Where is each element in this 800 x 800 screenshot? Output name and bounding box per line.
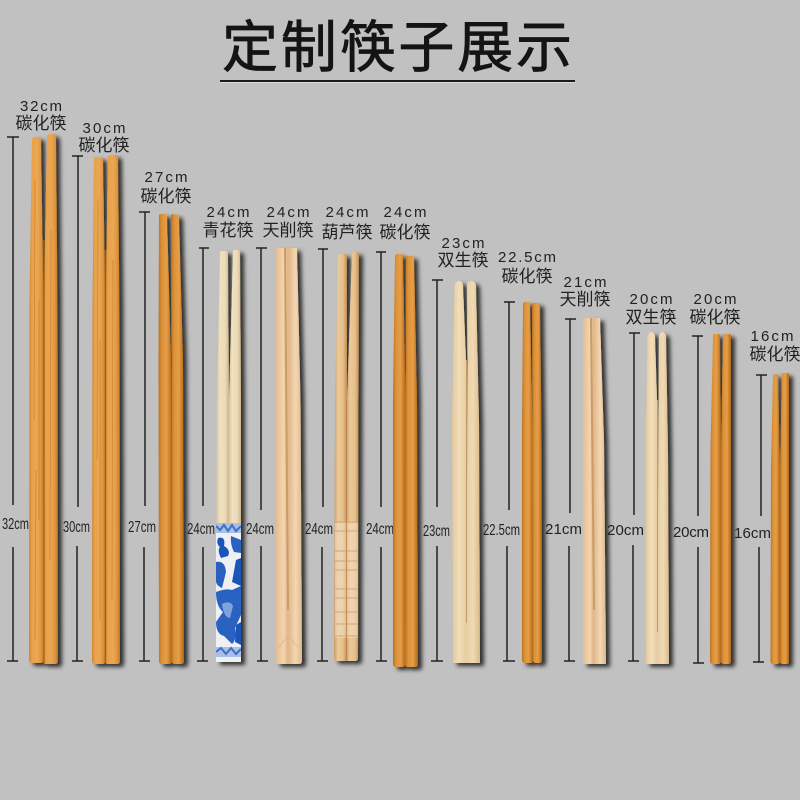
dimension line: 24cm: 24cm: [366, 521, 394, 538]
chopsticks: 22.5cm: [522, 302, 542, 663]
chopstick set: 32cm: [2, 98, 66, 664]
chopsticks: 27cm: [158, 214, 184, 664]
size label: 22.5cm 碳化筷: 22.5cm: [498, 249, 556, 266]
dimension line: 24cm: [187, 248, 215, 661]
dimension line: 22.5cm: 22.5cm: [483, 522, 520, 539]
dimension line: 16cm: 16cm: [734, 525, 771, 542]
size label: 24cm 葫芦筷: 24cm: [326, 204, 368, 221]
size label: 30cm: 30cm: [82, 120, 126, 137]
size label: 32cm: 碳化筷: [16, 114, 66, 133]
size label: 22.5cm 碳化筷: 碳化筷: [502, 267, 552, 286]
size label: 20cm 碳化筷: [690, 291, 740, 327]
chopsticks: 21cm tensoge: [583, 318, 606, 664]
size label: 23cm 双生筷: 双生筷: [438, 251, 488, 270]
chopsticks: blue-and-white: [216, 250, 241, 662]
dimension line: 24cm: 24cm: [246, 521, 274, 538]
size label: 24cm 青花筷: 24cm: [206, 204, 250, 221]
chopstick set: 24cm tensoge: [246, 204, 314, 664]
size label: 16cm 碳化筷: 碳化筷: [750, 345, 800, 364]
dimension line: 24cm: 24cm: [305, 521, 333, 538]
size label: 23cm 双生筷: 23cm: [442, 235, 484, 252]
dimension line: 16cm: [734, 375, 771, 662]
chopstick set: 21cm tensoge: [545, 274, 610, 664]
dimension line: 20cm: [607, 333, 644, 661]
size label: 21cm 天削筷: 天削筷: [560, 290, 610, 309]
size label: 24cm 葫芦筷: 葫芦筷: [322, 223, 372, 242]
size label: 23cm 双生筷: [438, 235, 488, 270]
dimension line: 24cm: [246, 248, 274, 661]
chopsticks: 20cm carbonized: [710, 334, 731, 664]
dimension line: 22.5cm: [483, 302, 520, 661]
blue porcelain pattern: [216, 523, 241, 657]
size label: 32cm: [16, 98, 66, 133]
chopsticks: tensoge: [276, 248, 302, 664]
size label: 24cm 碳化筷: 24cm: [384, 204, 426, 221]
dimension line: 24cm: 24cm: [187, 521, 215, 538]
size label: 24cm 碳化筷: 碳化筷: [380, 223, 430, 242]
chopsticks: 23cm twin: [452, 281, 480, 663]
dimension line: 30cm: 30cm: [63, 519, 90, 536]
chopstick set: 20cm carbonized: [673, 291, 740, 664]
dimension line: 32cm: 32cm: [2, 516, 29, 533]
chopstick set: 16cm: [734, 328, 800, 664]
size label: 30cm: [78, 120, 130, 155]
chopstick set: 23cm twin: [423, 235, 488, 663]
size label: 16cm 碳化筷: 16cm: [750, 328, 794, 345]
dimension line: 23cm: [423, 280, 450, 661]
size label: 20cm 碳化筷: 碳化筷: [690, 308, 740, 327]
size label: 20cm 碳化筷: 20cm: [694, 291, 736, 308]
chopsticks: 20cm twin: [646, 332, 669, 664]
chopsticks: gourd: [334, 252, 359, 661]
chopstick set: 22.5cm: [483, 249, 556, 663]
size label: 16cm 碳化筷: [750, 328, 800, 364]
title: 定制筷子展示: [222, 16, 572, 79]
size label: 24cm 天削筷: 24cm: [266, 204, 310, 221]
chopstick set: 24cm gourd: [305, 204, 372, 661]
size label: 32cm: 32cm: [20, 98, 62, 115]
chopsticks: 24cm carbonized: [393, 254, 418, 667]
size label: 27cm: 碳化筷: [140, 187, 192, 206]
size label: 24cm 天削筷: [262, 204, 314, 240]
chopstick set: 30cm: [63, 120, 130, 664]
size label: 24cm 青花筷: 青花筷: [202, 221, 254, 240]
dimension line: 32cm: [2, 137, 29, 661]
chopsticks: 32cm: [29, 134, 58, 664]
dimension line: 24cm: [366, 252, 394, 661]
dimension line: 27cm: [128, 212, 156, 661]
chopsticks: 30cm: [92, 155, 120, 664]
dimension line: 30cm: [63, 156, 90, 661]
size label: 30cm: 碳化筷: [78, 136, 130, 155]
dimension line: 24cm: [305, 249, 333, 661]
size label: 24cm 天削筷: 天削筷: [262, 221, 314, 240]
size label: 24cm 碳化筷: [380, 204, 430, 242]
size label: 24cm 葫芦筷: [322, 204, 372, 242]
dimension line: 21cm: [545, 319, 582, 661]
dimension line: 21cm: 21cm: [545, 521, 582, 538]
size label: 22.5cm 碳化筷: [498, 249, 556, 286]
size label: 24cm 青花筷: [202, 204, 254, 240]
size label: 21cm 天削筷: [560, 274, 610, 309]
chopsticks: 16cm: [770, 373, 789, 664]
dimension line: 20cm: 20cm: [673, 524, 709, 541]
dimension line: 27cm: 27cm: [128, 519, 156, 536]
chopstick set: 24cm blue-and-white: [187, 204, 254, 662]
size label: 20cm 双生筷: [626, 291, 676, 327]
chopstick set: 27cm: [128, 169, 192, 664]
size label: 20cm 双生筷: 20cm: [630, 291, 672, 308]
chopstick set: 20cm twin: [607, 291, 676, 664]
dimension line: 23cm: 23cm: [423, 523, 450, 540]
size label: 21cm 天削筷: 21cm: [564, 274, 606, 291]
size label: 20cm 双生筷: 双生筷: [626, 308, 676, 327]
size label: 27cm: [140, 169, 192, 206]
size label: 27cm: 27cm: [144, 169, 188, 186]
chopstick set: 24cm carbonized: [366, 204, 430, 667]
dimension line: 20cm: 20cm: [607, 522, 644, 539]
dimension line: 20cm: [673, 336, 709, 663]
